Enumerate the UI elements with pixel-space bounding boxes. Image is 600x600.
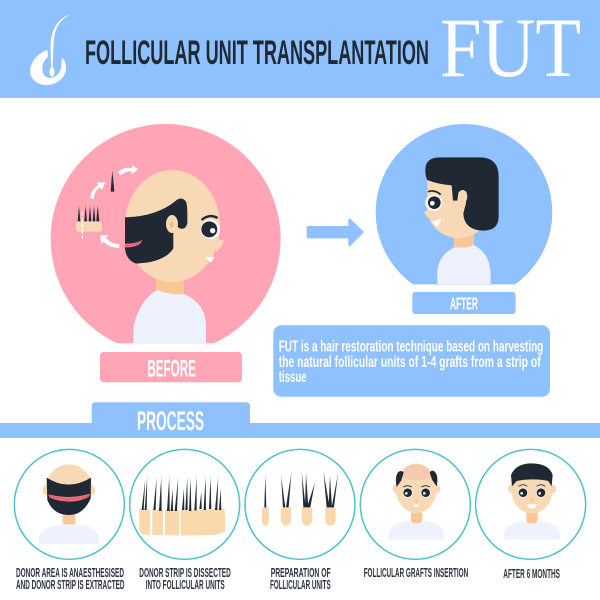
blue circle [376,124,552,301]
panel: before [51,124,281,383]
process heading band: PROCESS [137,406,204,436]
pink circle [51,124,281,354]
caption: PREPARATION OF [271,566,331,580]
illustration: balding man [125,170,224,343]
icon: hair follicle logo [30,14,71,85]
text block: description [273,325,550,397]
step 4: graft insertion [360,449,470,580]
hair strip graft [76,204,102,238]
step 2: donor strip [130,449,240,592]
label: before: BEFORE [147,356,196,383]
process heading band [0,402,600,438]
label: before [100,352,242,383]
step 2: donor strip: INTO FOLLICULAR UNITS [146,578,225,592]
heading: FUT: FUT [440,1,581,95]
step 1: donor area: AND DONOR STRIP IS EXTRACTED [16,578,124,592]
label: after [412,292,516,314]
label: after: AFTER [450,294,478,314]
step 1: donor area [14,449,124,592]
single hair [111,168,114,192]
illustration: man with hair [424,157,499,284]
step 3: follicular units [245,449,355,592]
caption: FOLLICULAR GRAFTS INSERTION [364,566,468,580]
caption: DONOR AREA IS ANAESTHESISED [16,566,124,580]
header banner [0,0,600,98]
step 3: follicular units: FOLLICULAR UNITS [270,578,331,592]
panel: after [307,124,552,314]
arrows: process cycle [90,165,138,248]
text block: description: tissue [279,369,307,386]
step 5: after 6 months [476,449,586,581]
arrow [307,218,364,246]
caption: DONOR STRIP IS DISSECTED [139,566,231,580]
